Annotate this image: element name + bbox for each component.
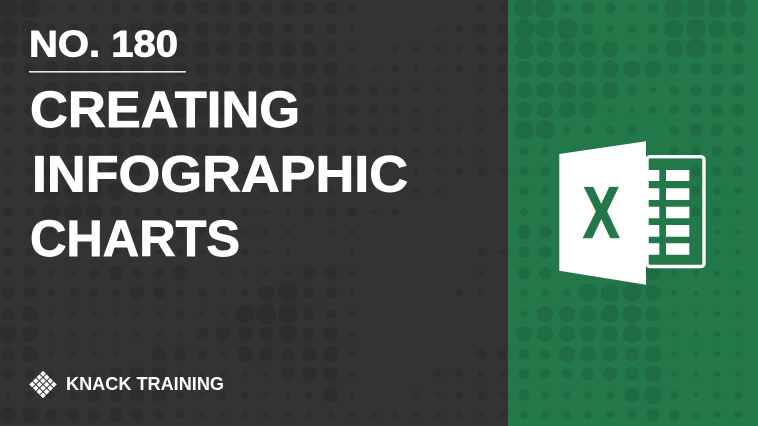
panel: green background with halftone dots (508, 0, 758, 426)
icon: excel logo (559, 141, 704, 285)
heading divider line (29, 71, 186, 73)
icon: open document page (559, 141, 646, 285)
icon: letter X: X (583, 174, 619, 254)
icon: knack training logo (29, 371, 57, 398)
title: CHARTS (30, 210, 240, 267)
title: INFOGRAPHIC (32, 146, 408, 202)
issue number: NO. 180 (29, 24, 178, 64)
title (30, 81, 408, 267)
icon: spreadsheet cells (646, 170, 689, 255)
title: CREATING (30, 81, 300, 138)
brand name: KNACK TRAINING (66, 374, 224, 394)
panel: dark background with halftone dots (0, 0, 508, 426)
icon: excel sheet frame (647, 157, 704, 266)
